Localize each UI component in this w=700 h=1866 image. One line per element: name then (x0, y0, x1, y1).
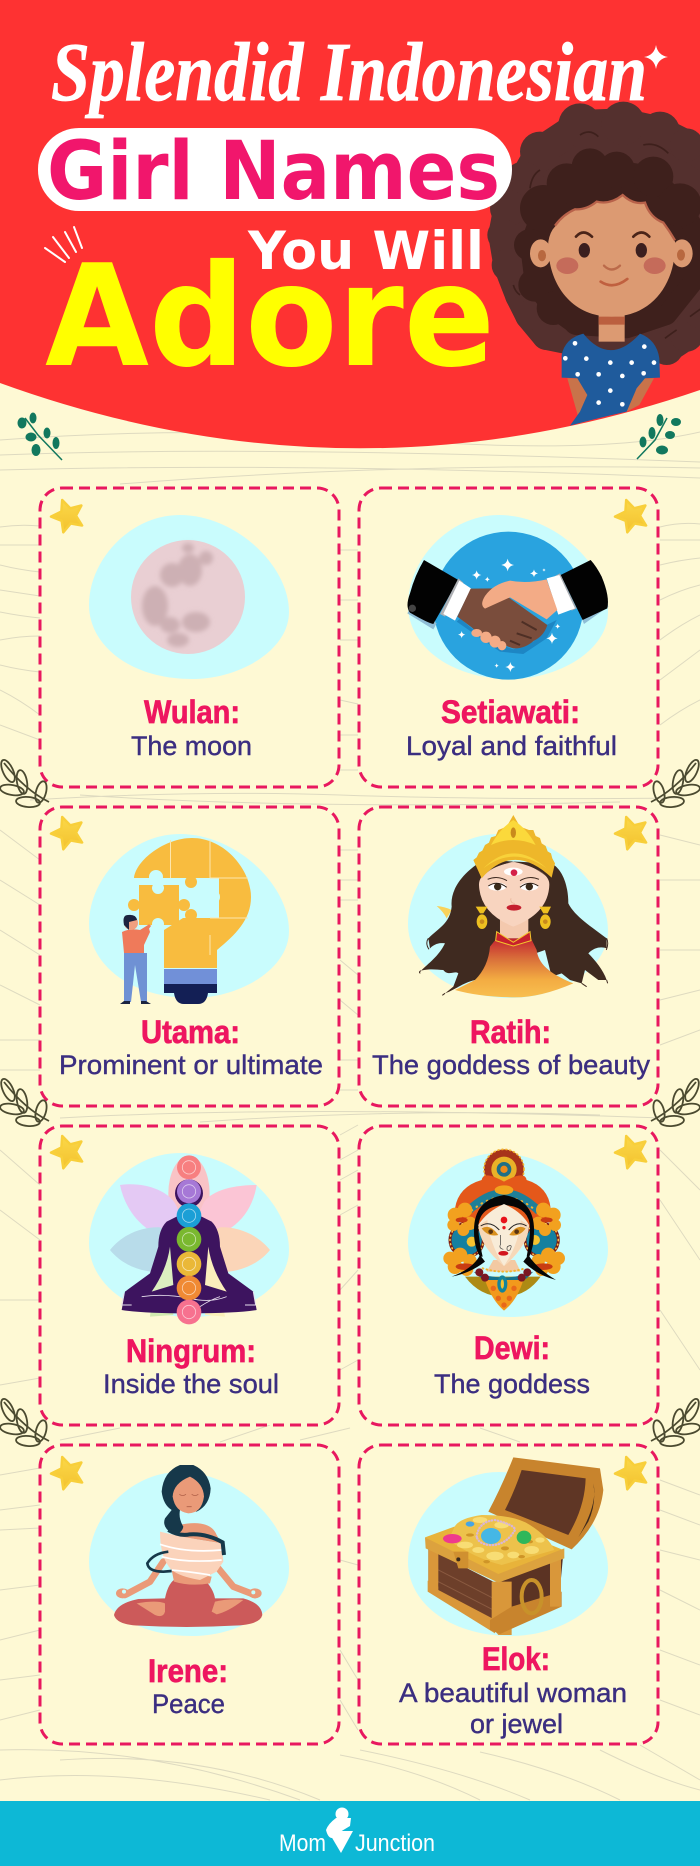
illustration: handshake (407, 532, 608, 680)
card border (359, 488, 658, 787)
illustration: woman meditating (114, 1465, 262, 1627)
name: Ratih: Ratih: (470, 1014, 551, 1050)
blob (408, 1472, 608, 1636)
panel: Setiawati (359, 488, 658, 787)
illustration: goddess of beauty (419, 815, 608, 997)
name: Dewi: Dewi: (474, 1330, 550, 1366)
icon: star (51, 1136, 82, 1168)
panel: Ratih (359, 807, 658, 1106)
icon: star (615, 500, 646, 532)
illustration: curly-haired girl (487, 102, 700, 426)
name: Irene: Irene: (148, 1653, 228, 1689)
blob (408, 1153, 608, 1317)
shirt (562, 334, 660, 426)
name: Elok: Elok: (482, 1641, 550, 1677)
neck (599, 312, 625, 342)
meaning: Peace (152, 1689, 225, 1719)
icon: star (615, 1136, 646, 1168)
card border (359, 1445, 658, 1744)
sprig row 2 right (651, 1077, 700, 1127)
name: Wulan: Wulan: (144, 694, 240, 730)
card border (40, 488, 339, 787)
ears (530, 239, 693, 267)
card border (40, 807, 339, 1106)
panel: Dewi (359, 1126, 658, 1425)
illustration: treasure chest (425, 1457, 603, 1635)
name: Ningrum: Ningrum: (126, 1333, 256, 1369)
logo icon: mother and heart (326, 1808, 353, 1853)
blob (89, 515, 289, 679)
panel: Elok (359, 1445, 658, 1744)
ornament: green sprig right (637, 414, 681, 459)
logo text: Mom: Mom (279, 1830, 326, 1857)
sprig row 3 right (651, 1397, 700, 1447)
icon: star (51, 817, 82, 849)
sprig row 2 left (0, 1077, 49, 1127)
header: red banner (0, 0, 700, 448)
sprig row 1 left (0, 758, 49, 808)
icon: star (615, 1457, 646, 1489)
logo text: Junction: Junction (355, 1830, 435, 1857)
card border (359, 807, 658, 1106)
illustration: goddess Durga (443, 1149, 565, 1311)
icon: emphasis lines (45, 227, 82, 262)
blob (89, 834, 289, 998)
blob (89, 1472, 289, 1636)
panel: Utama (40, 807, 339, 1106)
face (548, 196, 675, 317)
sprig row 1 right (651, 758, 700, 808)
blob (408, 834, 608, 998)
person (124, 953, 147, 1002)
blob (89, 1153, 289, 1317)
sprig row 3 left (0, 1397, 49, 1447)
meaning: A beautiful woman (399, 1678, 627, 1708)
title pill: Girl Names: Girl Names (47, 125, 500, 219)
meaning: Inside the soul (103, 1369, 279, 1399)
icon: star (51, 1457, 82, 1489)
ornaments: outlined leaf sprigs (0, 758, 700, 1447)
arms (568, 378, 588, 424)
illustration: meditating figure with chakras (110, 1155, 270, 1324)
footer: teal bar (0, 1801, 700, 1866)
red curved background (0, 0, 700, 448)
panel: Ningrum (40, 1126, 339, 1425)
meaning line two: or jewel (470, 1709, 563, 1739)
blob (408, 515, 608, 679)
illustration: moon (131, 540, 245, 654)
title: Adore: Adore (45, 235, 495, 399)
illustration: puzzle lightbulb (120, 838, 251, 1004)
meaning: Loyal and faithful (406, 731, 617, 761)
meaning: The goddess of beauty (372, 1050, 650, 1080)
meaning: The goddess (434, 1369, 590, 1399)
ornament: green sprig left (18, 412, 62, 460)
panel: Irene (40, 1445, 339, 1744)
card border (40, 1445, 339, 1744)
title: You Will: You Will (247, 221, 484, 282)
panel: Wulan (40, 488, 339, 787)
meaning: Prominent or ultimate (59, 1050, 323, 1080)
meaning: The moon (131, 731, 252, 761)
icon: sparkle (644, 45, 668, 69)
icon: star (615, 817, 646, 849)
card border (40, 1126, 339, 1425)
card border (359, 1126, 658, 1425)
icon: star (51, 500, 82, 532)
name: Utama: Utama: (141, 1014, 240, 1050)
name: Setiawati: Setiawati: (441, 694, 580, 730)
